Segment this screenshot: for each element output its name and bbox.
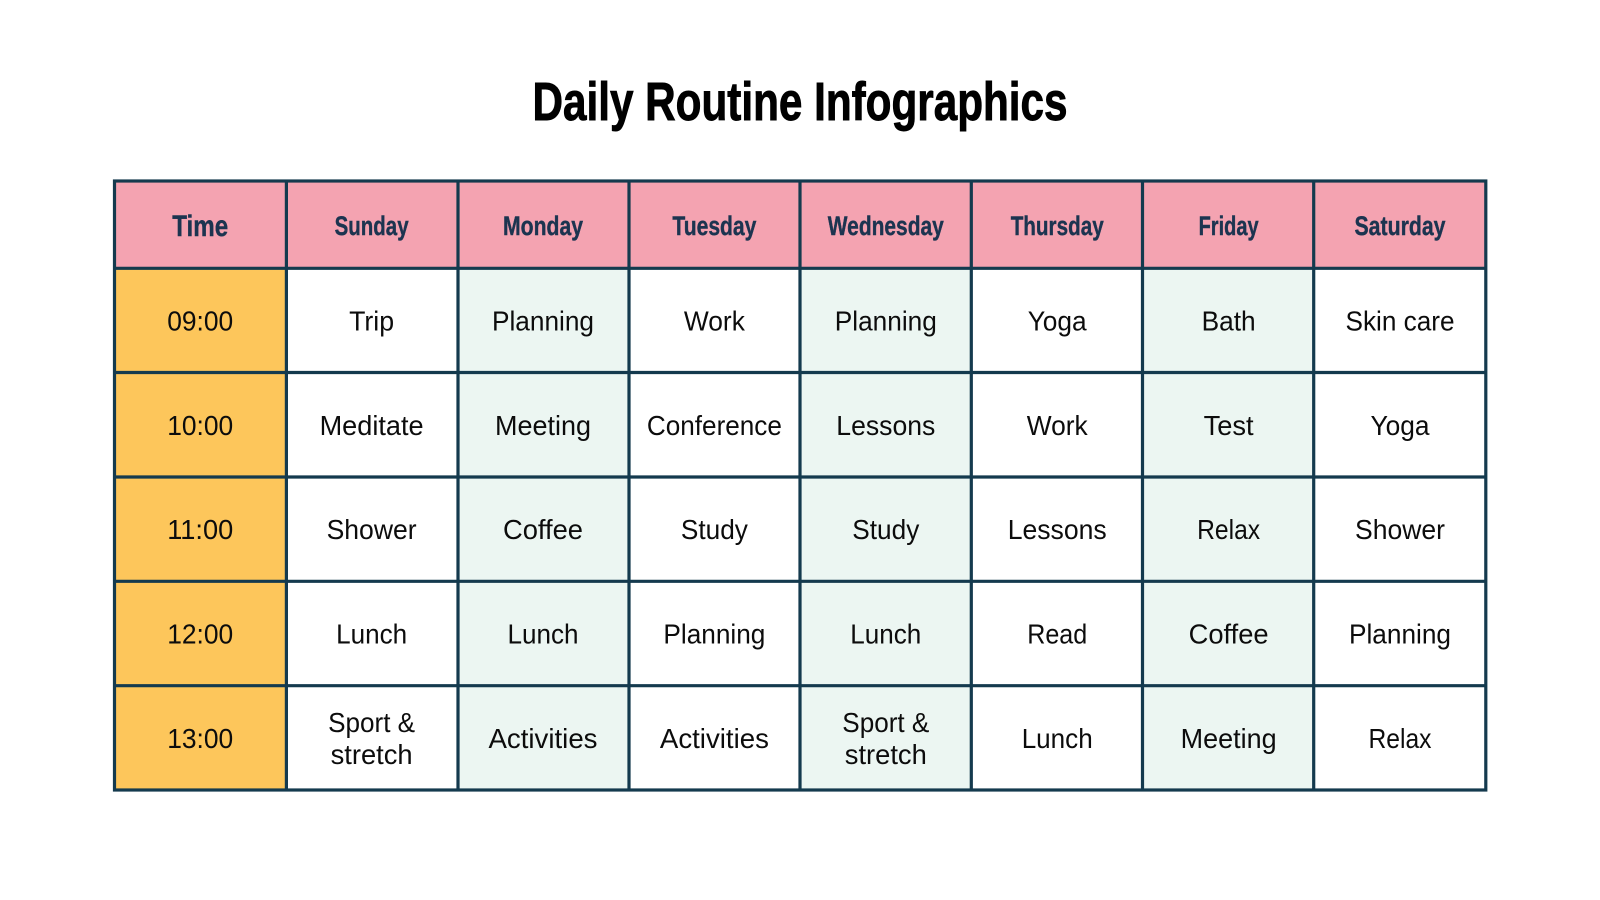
- Wednesday 10:00: Lessons: [836, 410, 935, 441]
- Thursday 12:00: [971, 581, 1142, 686]
- Tuesday 11:00: Study: [681, 514, 748, 545]
- time 11:00: 11:00: [167, 514, 233, 545]
- Thursday 10:00: Work: [1027, 410, 1089, 441]
- header: Sunday: [286, 181, 458, 268]
- time 13:00: 13:00: [167, 723, 233, 754]
- time 11:00: [114, 477, 286, 581]
- Tuesday 13:00: Activities: [660, 723, 769, 754]
- Wednesday 09:00: Planning: [835, 306, 937, 336]
- header: Monday: [458, 181, 629, 268]
- Friday 13:00: [1142, 686, 1314, 790]
- header: Wednesday: Wednesday: [828, 211, 944, 241]
- Friday 12:00: Coffee: [1189, 618, 1269, 650]
- Thursday 12:00: Read: [1027, 618, 1087, 650]
- Sunday 11:00: Shower: [327, 514, 417, 545]
- Sunday 12:00: Lunch: [336, 618, 407, 650]
- time 10:00: [114, 372, 286, 477]
- Sunday 09:00: [286, 268, 458, 372]
- header row: [114, 181, 1486, 268]
- Wednesday 13:00: stretch: [845, 739, 927, 770]
- header: Thursday: [971, 181, 1142, 268]
- Monday 09:00: [458, 268, 629, 372]
- Monday 09:00: Planning: [492, 306, 594, 336]
- Friday 09:00: [1142, 268, 1314, 372]
- Saturday 11:00: Shower: [1355, 514, 1445, 545]
- time 09:00: [114, 268, 286, 372]
- Sunday 13:00: stretch: [331, 739, 413, 770]
- Tuesday 10:00: [629, 372, 800, 477]
- Monday 10:00: [458, 372, 629, 477]
- Friday 10:00: Test: [1204, 410, 1254, 441]
- Sunday 11:00: [286, 477, 458, 581]
- Wednesday 11:00: [800, 477, 971, 581]
- row 09:00: [114, 268, 1486, 372]
- Monday 11:00: [458, 477, 629, 581]
- header: Wednesday: [800, 181, 971, 268]
- Thursday 13:00: Lunch: [1022, 723, 1093, 754]
- Tuesday 09:00: Work: [684, 306, 746, 336]
- Saturday 12:00: [1314, 581, 1486, 686]
- Wednesday 11:00: Study: [852, 514, 919, 545]
- row 12:00: [114, 581, 1486, 686]
- header: Thursday: Thursday: [1011, 211, 1104, 241]
- schedule table: [114, 181, 1486, 790]
- time 12:00: [114, 581, 286, 686]
- Sunday 09:00: Trip: [349, 306, 394, 336]
- Wednesday 10:00: [800, 372, 971, 477]
- header: Saturday: Saturday: [1354, 211, 1446, 241]
- Sunday 10:00: [286, 372, 458, 477]
- Tuesday 12:00: [629, 581, 800, 686]
- title: Daily Routine Infographics: [532, 72, 1068, 132]
- Wednesday 09:00: [800, 268, 971, 372]
- header: Monday: Monday: [503, 211, 583, 241]
- time 13:00: [114, 686, 286, 790]
- Wednesday 13:00: [800, 686, 971, 790]
- Saturday 10:00: Yoga: [1370, 410, 1430, 441]
- Friday 09:00: Bath: [1202, 306, 1256, 336]
- Thursday 10:00: [971, 372, 1142, 477]
- header: Time: Time: [172, 210, 228, 243]
- Monday 11:00: Coffee: [503, 514, 583, 545]
- Sunday 12:00: [286, 581, 458, 686]
- Tuesday 10:00: Conference: [647, 410, 782, 441]
- header: Sunday: Sunday: [335, 211, 409, 241]
- Saturday 10:00: [1314, 372, 1486, 477]
- row 13:00: [114, 686, 1486, 790]
- Monday 12:00: Lunch: [508, 618, 578, 650]
- Wednesday 13:00: Sport &: [842, 707, 930, 738]
- time 09:00: 09:00: [167, 306, 233, 336]
- table grid lines: [114, 181, 1486, 790]
- Tuesday 11:00: [629, 477, 800, 581]
- header: Tuesday: [629, 181, 800, 268]
- Thursday 09:00: Yoga: [1028, 306, 1087, 336]
- header: Friday: [1142, 181, 1314, 268]
- Friday 12:00: [1142, 581, 1314, 686]
- Saturday 11:00: [1314, 477, 1486, 581]
- Tuesday 13:00: [629, 686, 800, 790]
- row 10:00: [114, 372, 1486, 477]
- Monday 12:00: [458, 581, 629, 686]
- Thursday 09:00: [971, 268, 1142, 372]
- header: Saturday: [1314, 181, 1486, 268]
- Tuesday 12:00: Planning: [663, 618, 765, 650]
- Thursday 11:00: [971, 477, 1142, 581]
- Sunday 13:00: Sport &: [328, 707, 415, 738]
- time 12:00: 12:00: [167, 618, 233, 650]
- header: Tuesday: Tuesday: [672, 211, 756, 241]
- header: Time: [114, 181, 286, 268]
- Monday 10:00: Meeting: [495, 410, 591, 441]
- Friday 10:00: [1142, 372, 1314, 477]
- Friday 11:00: [1142, 477, 1314, 581]
- header: Friday: Friday: [1199, 211, 1259, 241]
- Saturday 09:00: [1314, 268, 1486, 372]
- Saturday 13:00: [1314, 686, 1486, 790]
- Saturday 13:00: Relax: [1368, 723, 1432, 754]
- Sunday 10:00: Meditate: [320, 410, 424, 441]
- time 10:00: 10:00: [167, 410, 233, 441]
- Friday 11:00: Relax: [1197, 514, 1260, 545]
- Thursday 13:00: [971, 686, 1142, 790]
- Monday 13:00: [458, 686, 629, 790]
- Sunday 13:00: [286, 686, 458, 790]
- Friday 13:00: Meeting: [1181, 723, 1277, 754]
- Saturday 09:00: Skin care: [1346, 306, 1454, 336]
- Monday 13:00: Activities: [488, 723, 598, 754]
- Saturday 12:00: Planning: [1349, 618, 1451, 650]
- Wednesday 12:00: [800, 581, 971, 686]
- row 11:00: [114, 477, 1486, 581]
- Thursday 11:00: Lessons: [1008, 514, 1107, 545]
- Tuesday 09:00: [629, 268, 800, 372]
- Wednesday 12:00: Lunch: [850, 618, 921, 650]
